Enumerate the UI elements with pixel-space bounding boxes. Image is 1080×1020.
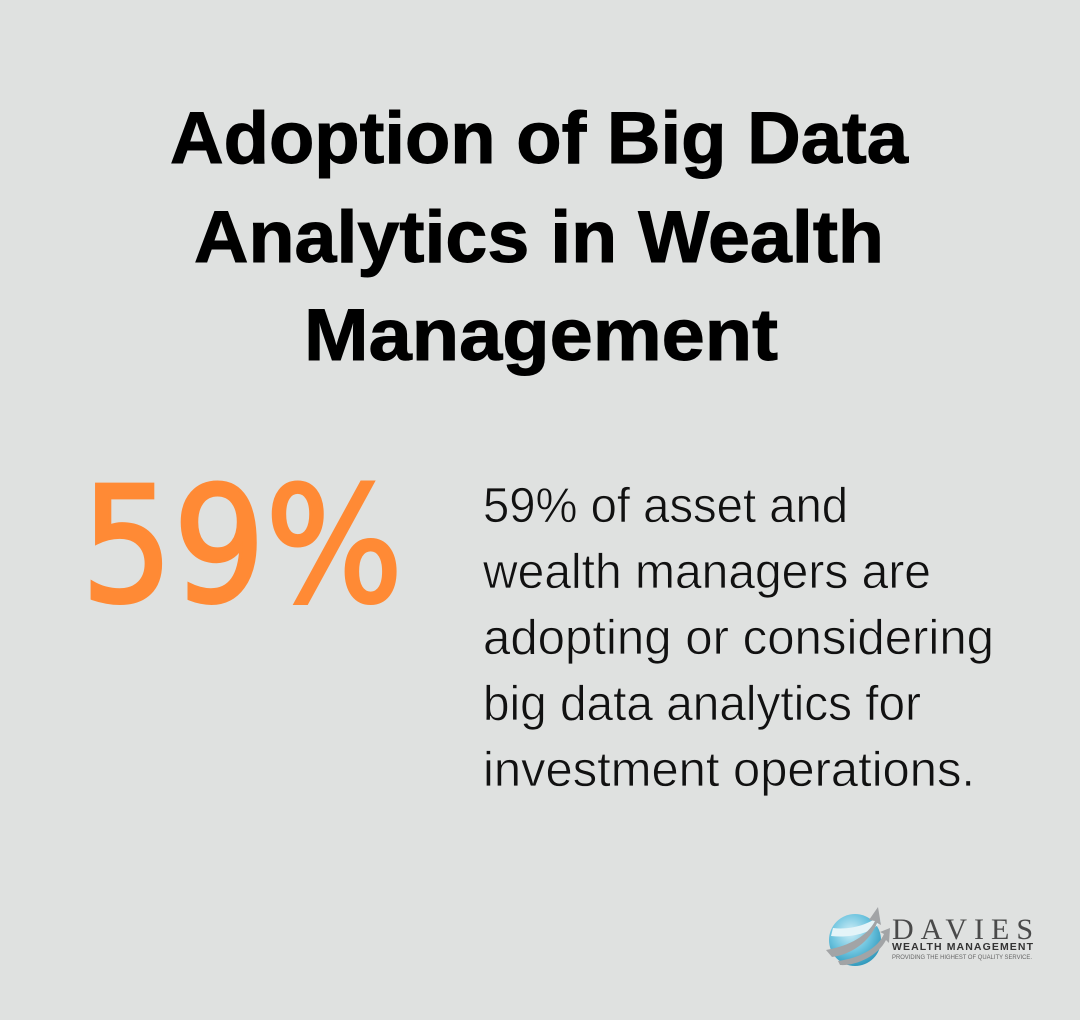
title: Management bbox=[304, 295, 778, 376]
logo wordmark: DAVIES bbox=[892, 913, 1033, 946]
description text bbox=[482, 479, 994, 797]
big statistic: 59% bbox=[81, 452, 403, 639]
logo: Davies Wealth Management bbox=[826, 907, 1034, 966]
description text: investment operations. bbox=[483, 743, 975, 797]
logo tagline: PROVIDING THE HIGHEST OF QUALITY SERVICE. bbox=[892, 954, 1032, 961]
title: Adoption of Big Data bbox=[170, 98, 909, 179]
description text: 59% of asset and bbox=[483, 479, 848, 533]
description text: adopting or considering bbox=[483, 611, 994, 665]
title bbox=[170, 98, 909, 376]
title: Analytics in Wealth bbox=[194, 197, 884, 278]
description text: big data analytics for bbox=[483, 677, 921, 731]
description text: wealth managers are bbox=[482, 545, 931, 599]
icon: globe with arrows bbox=[826, 907, 890, 966]
logo subtitle: WEALTH MANAGEMENT bbox=[892, 941, 1034, 953]
